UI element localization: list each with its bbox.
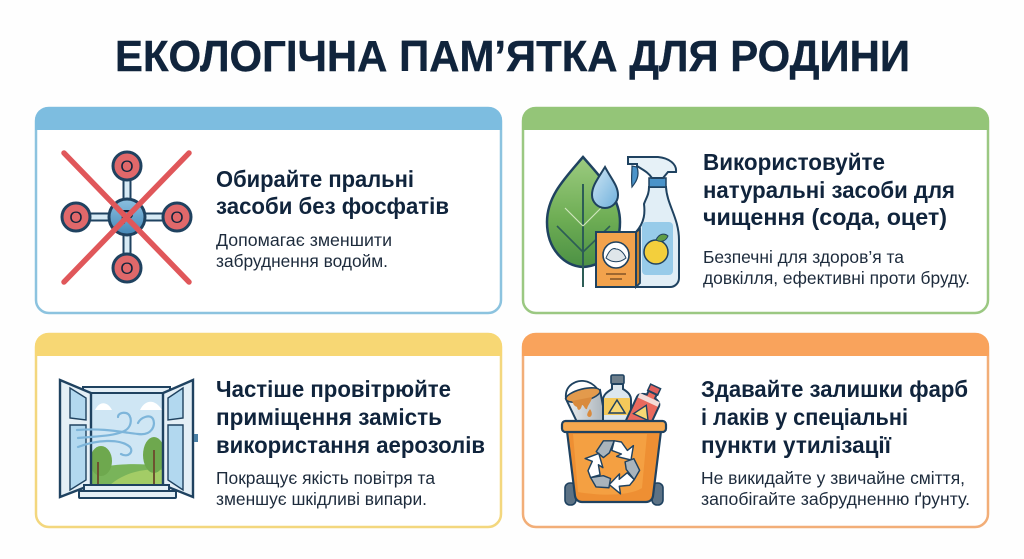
warning bottle [603, 375, 631, 421]
bin rim [562, 421, 666, 432]
panel card [522, 107, 989, 313]
body text [216, 230, 392, 271]
spray bottle [628, 157, 679, 287]
body text: зменшує шкідливі випари. [216, 489, 427, 509]
panel: natural cleaners [522, 107, 989, 313]
wheels [565, 483, 663, 505]
panel: phosphate-free detergents [35, 107, 502, 313]
body text: Безпечні для здоров’я та [703, 247, 904, 267]
left sash [60, 380, 91, 497]
recycling symbol [581, 441, 643, 496]
heading: засоби без фосфатів [216, 193, 449, 219]
icon: recycling bin with paint and chemicals [562, 375, 666, 505]
icon: crossed phosphate molecule: O [170, 208, 184, 227]
soda box [596, 229, 640, 287]
body text: забруднення водойм. [216, 251, 388, 271]
body text: запобігайте забрудненню ґрунту. [701, 489, 970, 509]
right sash [163, 380, 198, 497]
window sill [79, 485, 176, 498]
bin body [567, 431, 661, 502]
panel card [35, 107, 502, 313]
heading: чищення (сода, оцет) [703, 204, 947, 230]
title: ЕКОЛОГІЧНА ПАМ’ЯТКА ДЛЯ РОДИНИ [115, 32, 910, 81]
leaf [547, 157, 620, 287]
panel card [35, 333, 502, 527]
heading [216, 166, 449, 219]
heading [216, 376, 485, 458]
icon: crossed phosphate molecule [62, 152, 191, 282]
heading [701, 376, 968, 458]
body text [703, 247, 970, 288]
body text [216, 468, 435, 509]
red bottle [624, 381, 666, 435]
icon: open window with breeze [60, 380, 198, 498]
breeze [77, 413, 154, 455]
panel: paint disposal [522, 333, 989, 527]
heading: Обирайте пральні [216, 166, 414, 192]
body text [701, 468, 970, 509]
icon: crossed phosphate molecule: O [120, 259, 134, 278]
window frame [91, 393, 163, 485]
icon: crossed phosphate molecule: O [69, 208, 83, 227]
body text: довкілля, ефективні проти бруду. [703, 268, 970, 288]
heading: використання аерозолів [216, 432, 485, 458]
panel: ventilate rooms [35, 333, 502, 527]
body text: Допомагає зменшити [216, 230, 392, 250]
body text: Не викидайте у звичайне сміття, [701, 468, 965, 488]
drop [592, 167, 618, 208]
paint can [565, 381, 606, 422]
window top bar [83, 387, 170, 393]
panel card [522, 333, 989, 527]
body text: Покращує якість повітря та [216, 468, 435, 488]
heading: Використовуйте [703, 149, 885, 175]
icon: leaf, drop, spray bottle and soda box [547, 157, 679, 287]
heading: Здавайте залишки фарб [701, 376, 968, 402]
icon: crossed phosphate molecule: O [120, 157, 134, 176]
heading: приміщення замість [216, 404, 442, 430]
view through window [90, 393, 165, 485]
heading: і лаків у спеціальні [701, 404, 908, 430]
heading: Частіше провітрюйте [216, 376, 451, 402]
icon: crossed phosphate molecule: P [120, 207, 134, 229]
heading: натуральні засоби для [703, 177, 955, 203]
heading: пункти утилізації [701, 432, 892, 458]
heading [703, 149, 955, 230]
